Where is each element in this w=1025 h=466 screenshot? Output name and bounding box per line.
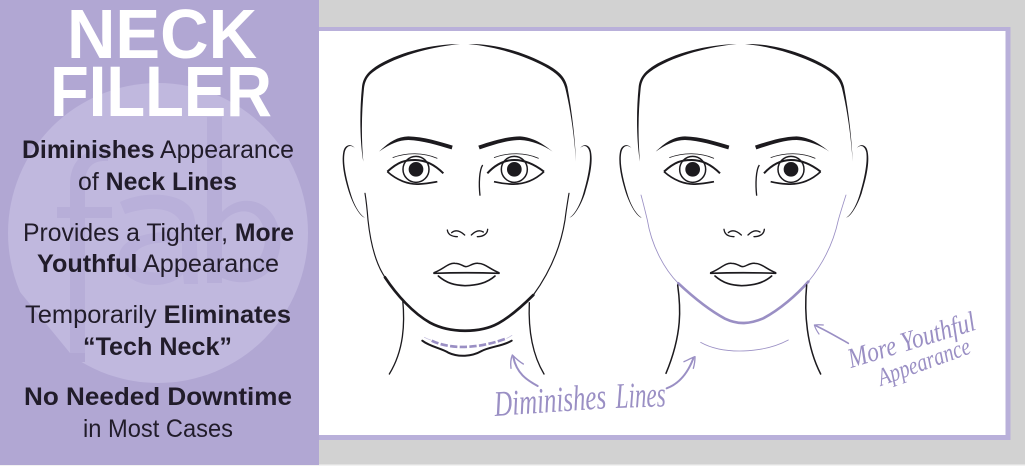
title: FILLER: [50, 53, 272, 132]
text block: diminishes appearance: of Neck Lines: [78, 168, 237, 196]
arrow: to youthful neck: [814, 325, 848, 343]
text block: diminishes appearance: [22, 136, 294, 196]
jaw, neck, mouth and nose: [365, 193, 569, 374]
title: [50, 0, 272, 132]
jaw, neck, mouth and nose: [641, 195, 846, 374]
head and ears: [619, 44, 868, 218]
callout: more youthful appearance: More Youthful: [843, 306, 979, 375]
text block: downtime: No Needed Downtime: [24, 383, 292, 411]
panel: illustration frame: [319, 27, 1010, 440]
callout: diminishes lines: Lines: [614, 374, 666, 416]
text block: tech neck: “Tech Neck”: [83, 333, 232, 361]
text block: diminishes appearance: Diminishes Appearance: [22, 136, 294, 164]
text block: tighter youthful appearance: Youthful Appearance: [37, 250, 279, 278]
illustration: face before: [343, 44, 592, 374]
panel: left benefits sidebar: [0, 0, 319, 465]
callout: more youthful appearance: Appearance: [872, 333, 974, 392]
text block: tighter youthful appearance: Provides a Tighter, More: [23, 219, 294, 247]
text block: tech neck: [25, 301, 291, 361]
text block: tighter youthful appearance: [23, 219, 294, 278]
text block: tech neck: Temporarily Eliminates: [25, 301, 291, 329]
arrow: to neck lines, left: [511, 355, 538, 386]
callout: diminishes lines: Diminishes: [492, 376, 607, 424]
illustration: face after: [619, 44, 868, 374]
head and ears: [343, 44, 592, 218]
text block: downtime: in Most Cases: [83, 415, 233, 443]
arrow: to neck lines, right: [667, 357, 695, 388]
text block: downtime: [24, 383, 292, 443]
watermark: fab logo: [8, 83, 308, 383]
callout: more youthful appearance: [843, 306, 979, 392]
